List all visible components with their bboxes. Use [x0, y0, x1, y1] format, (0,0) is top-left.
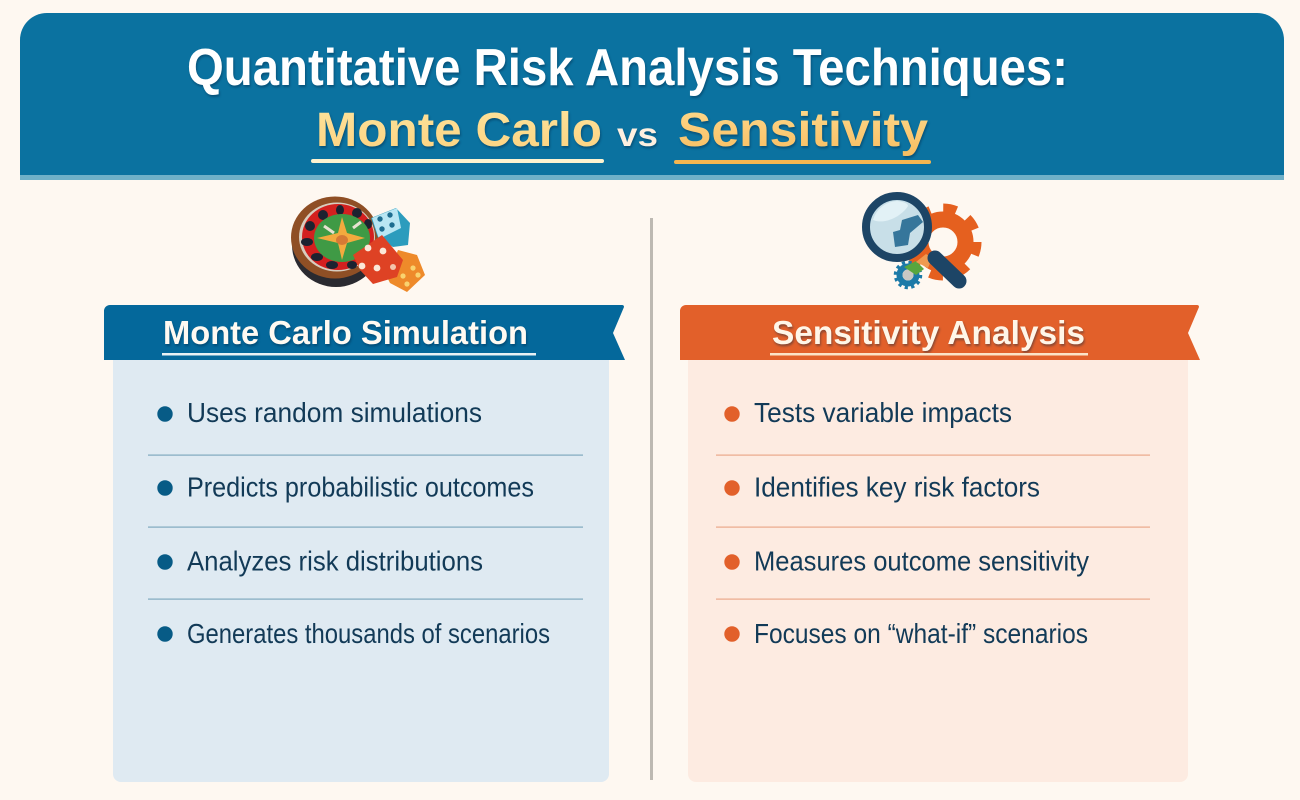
list item: Tests variable impacts: Tests variable impacts: [754, 397, 1012, 428]
ribbon heading: [680, 305, 1200, 360]
title: Sensitivity: Sensitivity: [678, 104, 928, 157]
ribbon heading: Sensitivity Analysis: [772, 314, 1085, 351]
list item: Analyzes risk distributions: Analyzes risk distributions: [187, 546, 483, 576]
list item: Generates thousands of scenarios: Generates thousands of scenarios: [187, 618, 550, 649]
list item: Uses random simulations: Uses random simulations: [187, 397, 482, 428]
panel: Sensitivity Analysis: [680, 305, 1200, 782]
centre divider: [650, 218, 653, 780]
title: Monte Carlo: Monte Carlo: [316, 104, 602, 157]
icon: roulette wheel and dice: [291, 196, 425, 292]
orange die: [387, 250, 425, 292]
icon: magnifier and gears: [866, 196, 977, 288]
ribbon heading: [104, 305, 625, 360]
list item: Measures outcome sensitivity: Measures outcome sensitivity: [754, 546, 1089, 576]
blue die: [371, 208, 410, 247]
panel body: [113, 358, 609, 782]
list item: Identifies key risk factors: Identifies key risk factors: [754, 472, 1040, 502]
ribbon heading: Monte Carlo Simulation: [163, 314, 528, 351]
title line one: Quantitative Risk Analysis Techniques:: [187, 39, 1068, 97]
panel body: [688, 358, 1188, 782]
panel: Monte Carlo Simulation: [104, 305, 625, 782]
list item: Predicts probabilistic outcomes: Predicts probabilistic outcomes: [187, 472, 534, 502]
header banner: [20, 13, 1284, 180]
title: vs: vs: [617, 116, 658, 153]
list item: Focuses on what-if scenarios: Focuses on “what-if” scenarios: [754, 618, 1088, 649]
red die: [353, 235, 403, 284]
